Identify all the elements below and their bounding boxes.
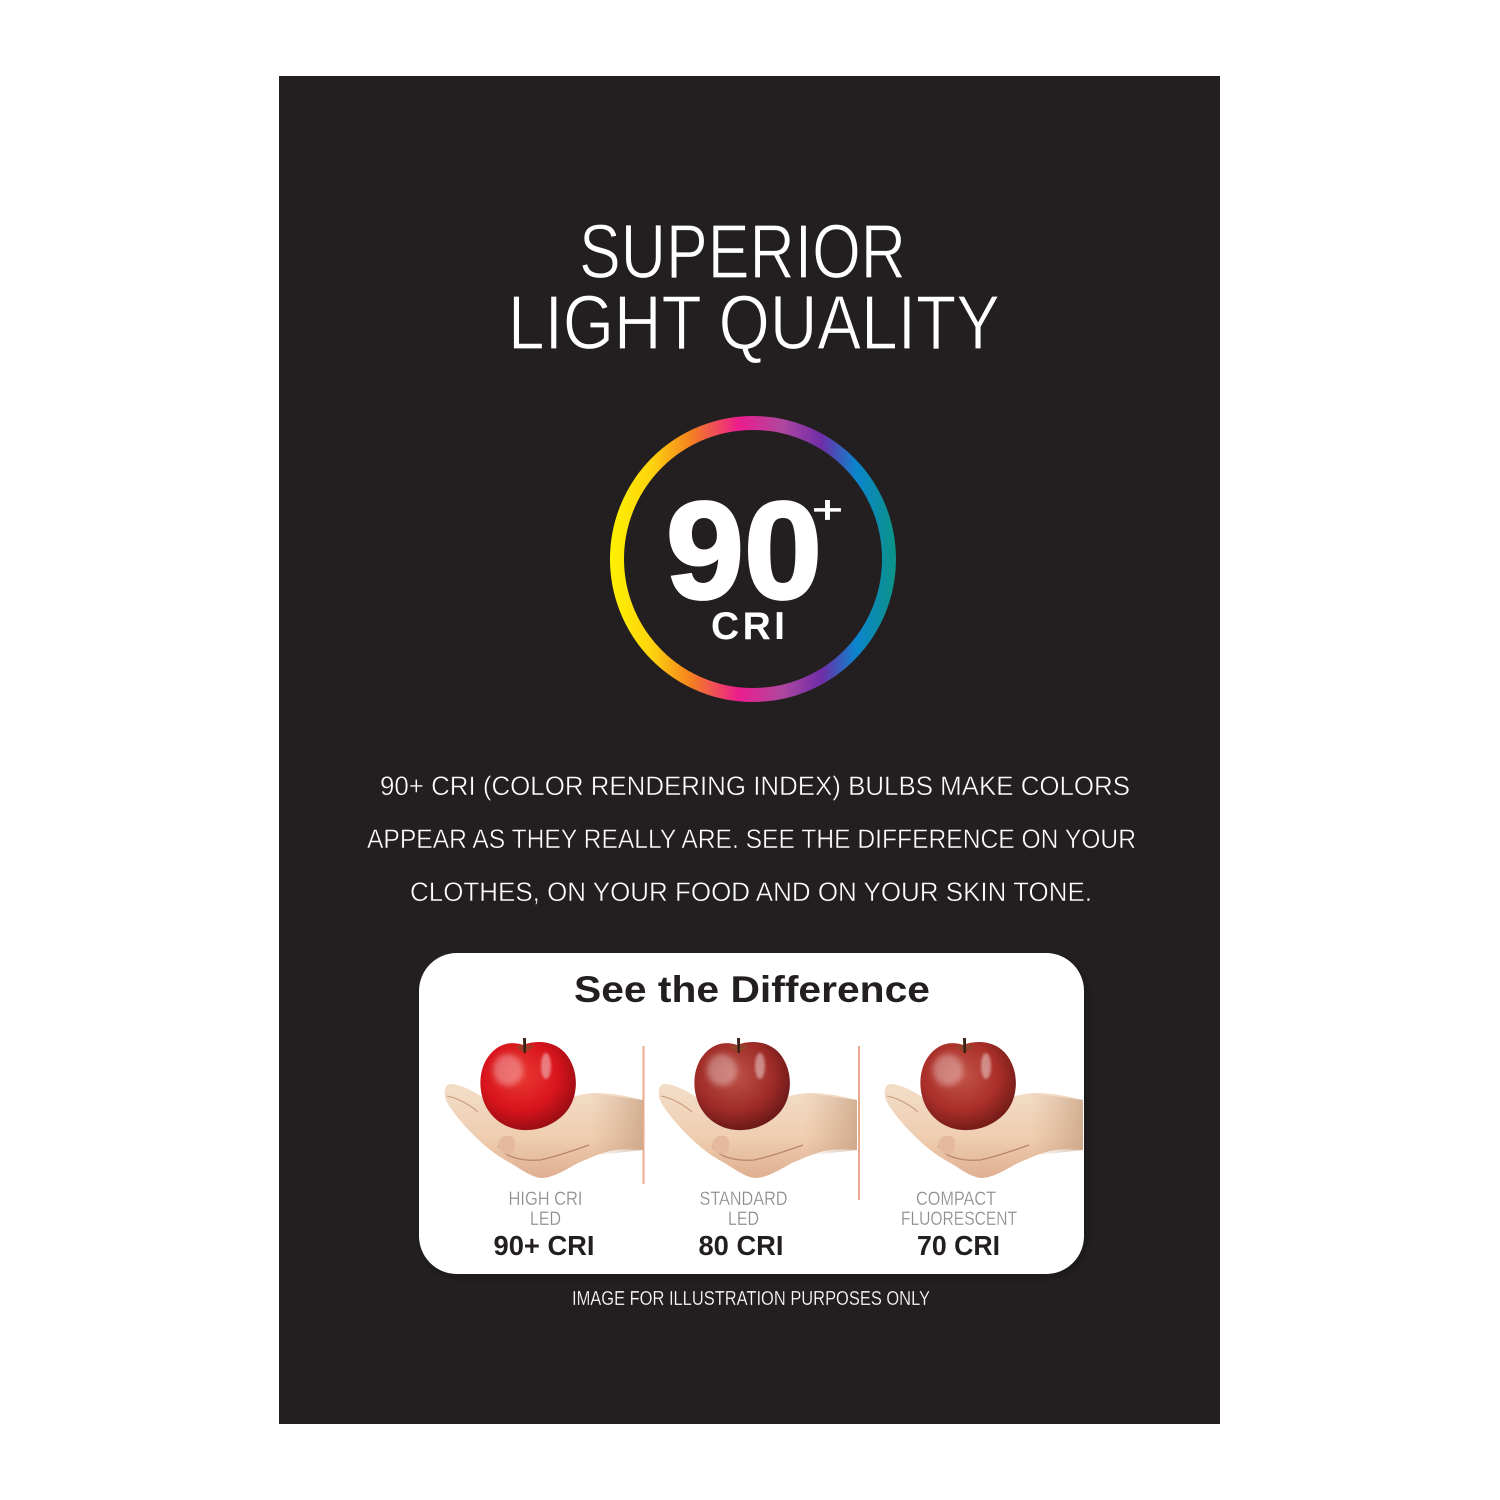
badge: 90+ CRI	[617, 423, 889, 695]
rainbow ring	[617, 423, 889, 695]
comparison: high CRI LED: 90+ CRI	[494, 1230, 594, 1261]
footnote: IMAGE FOR ILLUSTRATION PURPOSES ONLY	[572, 1288, 930, 1310]
comparison: standard LED	[659, 1038, 857, 1261]
comparison: compact fluorescent: 70 CRI	[917, 1230, 1000, 1261]
comparison: compact fluorescent: COMPACT	[916, 1189, 996, 1210]
description text: APPEAR AS THEY REALLY ARE. SEE THE DIFFERENCE ON YOUR	[367, 824, 1136, 854]
panel: see the difference	[419, 953, 1084, 1274]
title	[508, 209, 1000, 366]
title: LIGHT QUALITY	[508, 280, 1000, 366]
comparison: standard LED: STANDARD	[700, 1189, 788, 1210]
comparison: high CRI LED: HIGH CRI	[508, 1189, 582, 1210]
description text: CLOTHES, ON YOUR FOOD AND ON YOUR SKIN TONE.	[410, 877, 1092, 907]
description text	[367, 771, 1136, 907]
comparison: compact fluorescent: FLUORESCENT	[901, 1209, 1017, 1230]
badge label: CRI	[711, 605, 785, 648]
comparison: compact fluorescent	[885, 1038, 1083, 1261]
panel heading: See the Difference	[574, 969, 930, 1010]
panel background	[419, 953, 1084, 1274]
comparison: standard LED: LED	[728, 1209, 759, 1230]
divider	[858, 1046, 860, 1200]
comparison: high CRI LED: LED	[530, 1209, 561, 1230]
comparison: high CRI LED	[445, 1038, 643, 1261]
comparison: standard LED: 80 CRI	[698, 1230, 784, 1261]
title: SUPERIOR	[579, 209, 906, 295]
description text: 90+ CRI (COLOR RENDERING INDEX) BULBS MAKE COLORS	[380, 771, 1130, 801]
plus sign: +	[812, 489, 843, 532]
divider	[642, 1046, 644, 1184]
background panel	[279, 76, 1220, 1424]
badge number: 90	[666, 474, 822, 628]
